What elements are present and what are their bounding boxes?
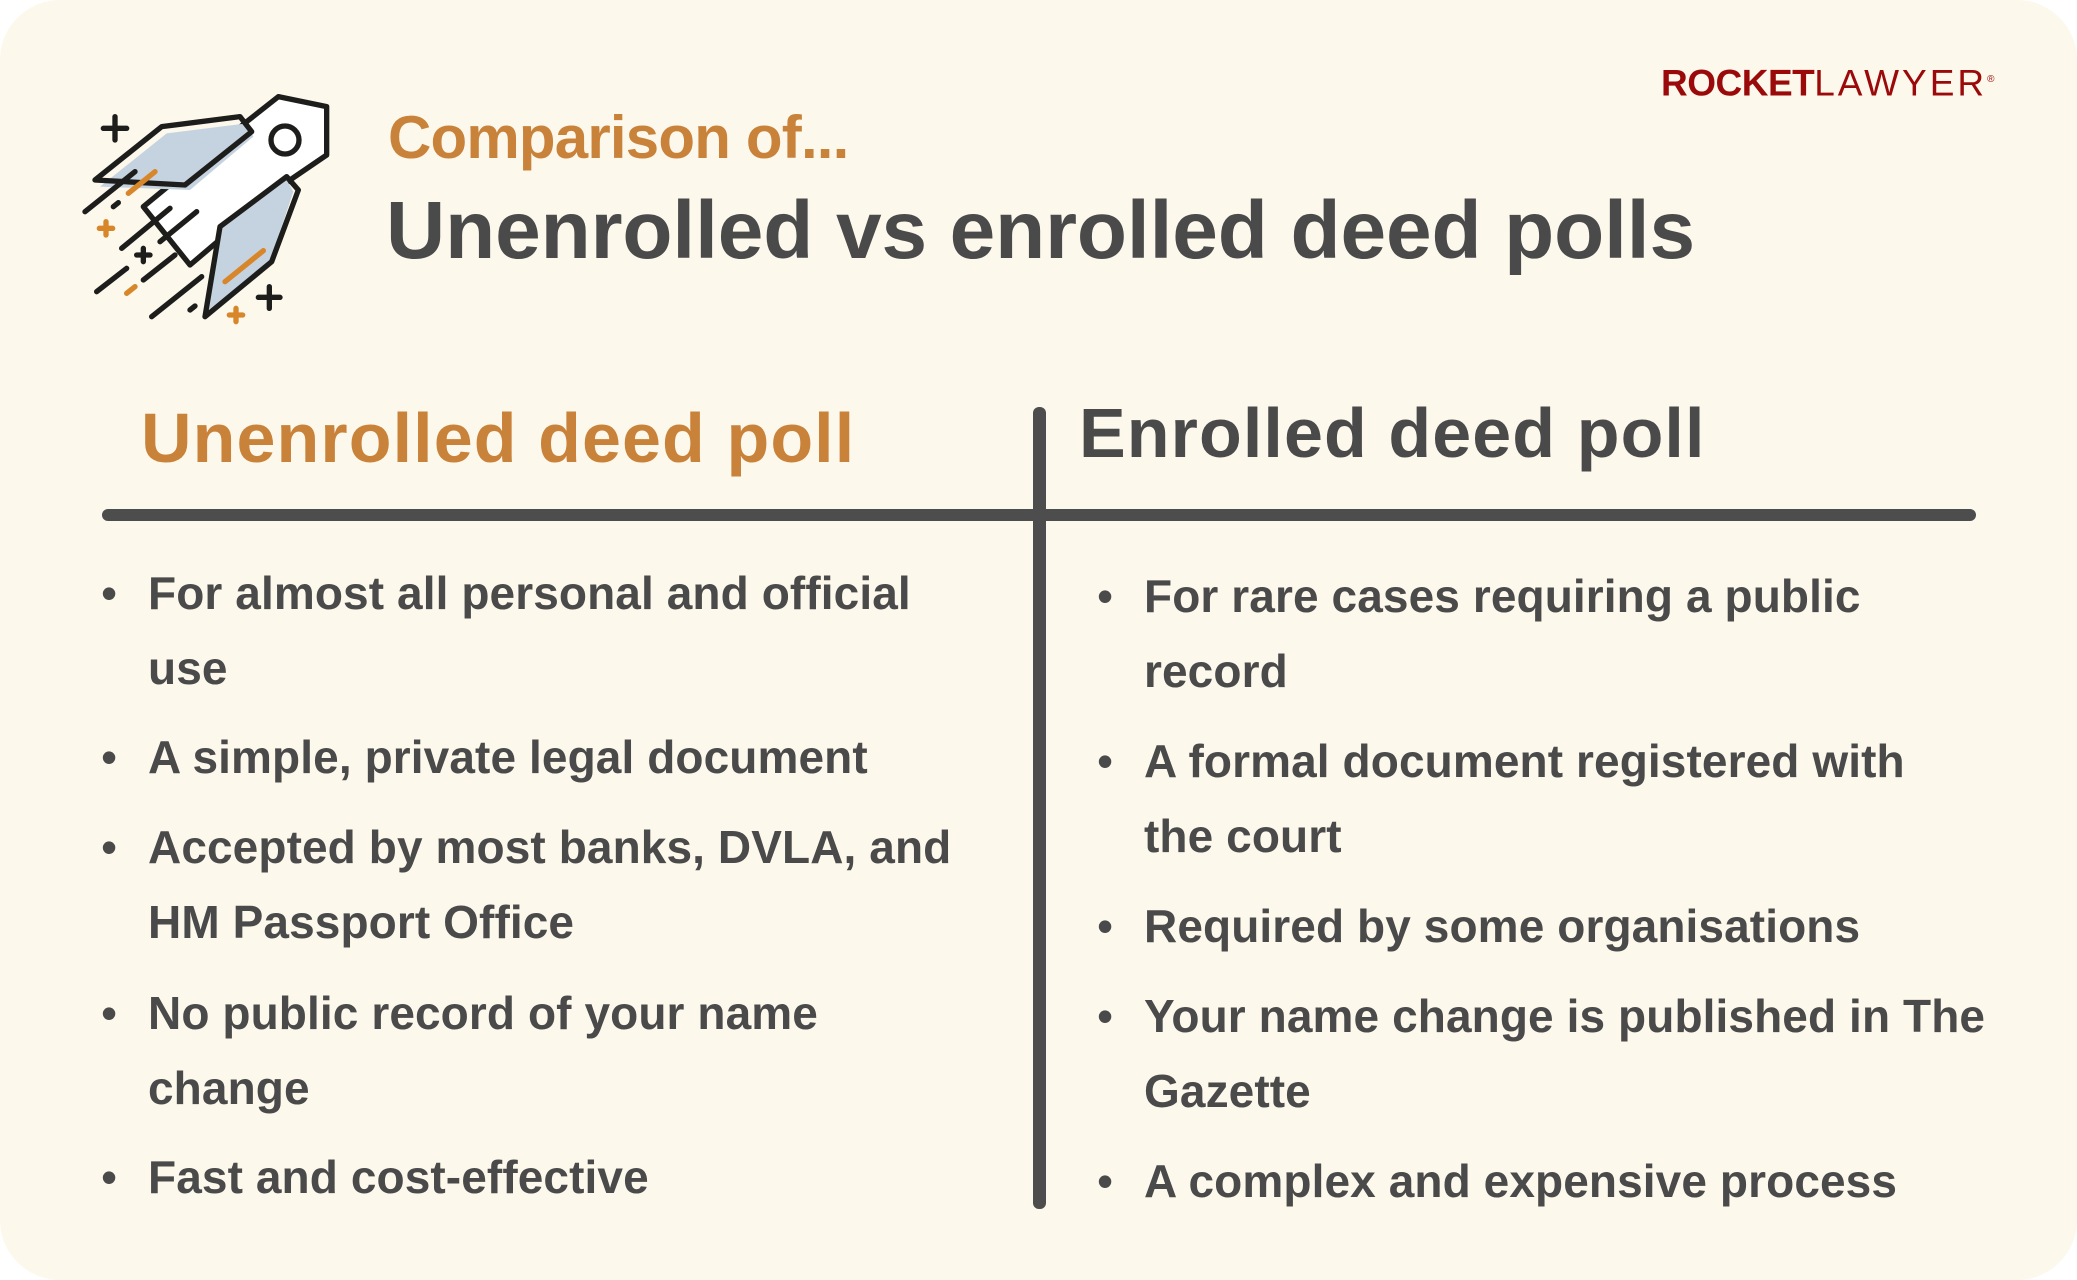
bullet item: Fast and cost-effective xyxy=(148,1151,649,1203)
bullet item xyxy=(1097,735,1905,862)
bullet item xyxy=(1097,570,1861,697)
bullet item: use xyxy=(148,642,228,694)
divider: horizontal rule xyxy=(102,509,1976,521)
bullet item: For rare cases requiring a public xyxy=(1144,570,1861,622)
logo: Rocket Lawyer: ROCKETLAWYER® xyxy=(1661,62,1994,103)
bullet item: HM Passport Office xyxy=(148,896,574,948)
bullet item: A simple, private legal document xyxy=(148,731,868,783)
panel: enrolled list: • xyxy=(1097,1155,1113,1207)
panel: enrolled list xyxy=(1097,570,1985,1207)
heading: unenrolled: Unenrolled deed poll xyxy=(141,399,855,477)
heading: enrolled: Enrolled deed poll xyxy=(1079,394,1706,472)
panel: enrolled list: • xyxy=(1097,570,1113,622)
divider: vertical rule xyxy=(1033,407,1046,1209)
bullet item: Your name change is published in The xyxy=(1144,990,1985,1042)
bullet item: Gazette xyxy=(1144,1065,1311,1117)
bullet item: change xyxy=(148,1062,310,1114)
panel: unenrolled list: • xyxy=(101,821,117,873)
panel: unenrolled list: • xyxy=(101,731,117,783)
bullet item: For almost all personal and official xyxy=(148,567,911,619)
panel: enrolled list: • xyxy=(1097,990,1113,1042)
title: subtitle: Comparison of... xyxy=(388,104,849,171)
bullet item: Accepted by most banks, DVLA, and xyxy=(148,821,951,873)
bullet item xyxy=(1097,990,1985,1117)
panel: enrolled list: • xyxy=(1097,900,1113,952)
panel: unenrolled list: • xyxy=(101,1151,117,1203)
title: main: Unenrolled vs enrolled deed polls xyxy=(386,185,1695,276)
bullet item xyxy=(101,567,911,694)
panel: unenrolled list xyxy=(101,567,951,1203)
bullet item: record xyxy=(1144,645,1288,697)
bullet item: A complex and expensive process xyxy=(1144,1155,1897,1207)
bullet item: No public record of your name xyxy=(148,987,818,1039)
panel: unenrolled list: • xyxy=(101,987,117,1039)
panel: unenrolled list: • xyxy=(101,567,117,619)
bullet item: Required by some organisations xyxy=(1144,900,1860,952)
bullet item xyxy=(101,987,818,1114)
icon: rocket xyxy=(82,94,330,324)
bullet item: the court xyxy=(1144,810,1342,862)
panel: enrolled list: • xyxy=(1097,735,1113,787)
bullet item xyxy=(101,821,951,948)
bullet item: A formal document registered with xyxy=(1144,735,1905,787)
